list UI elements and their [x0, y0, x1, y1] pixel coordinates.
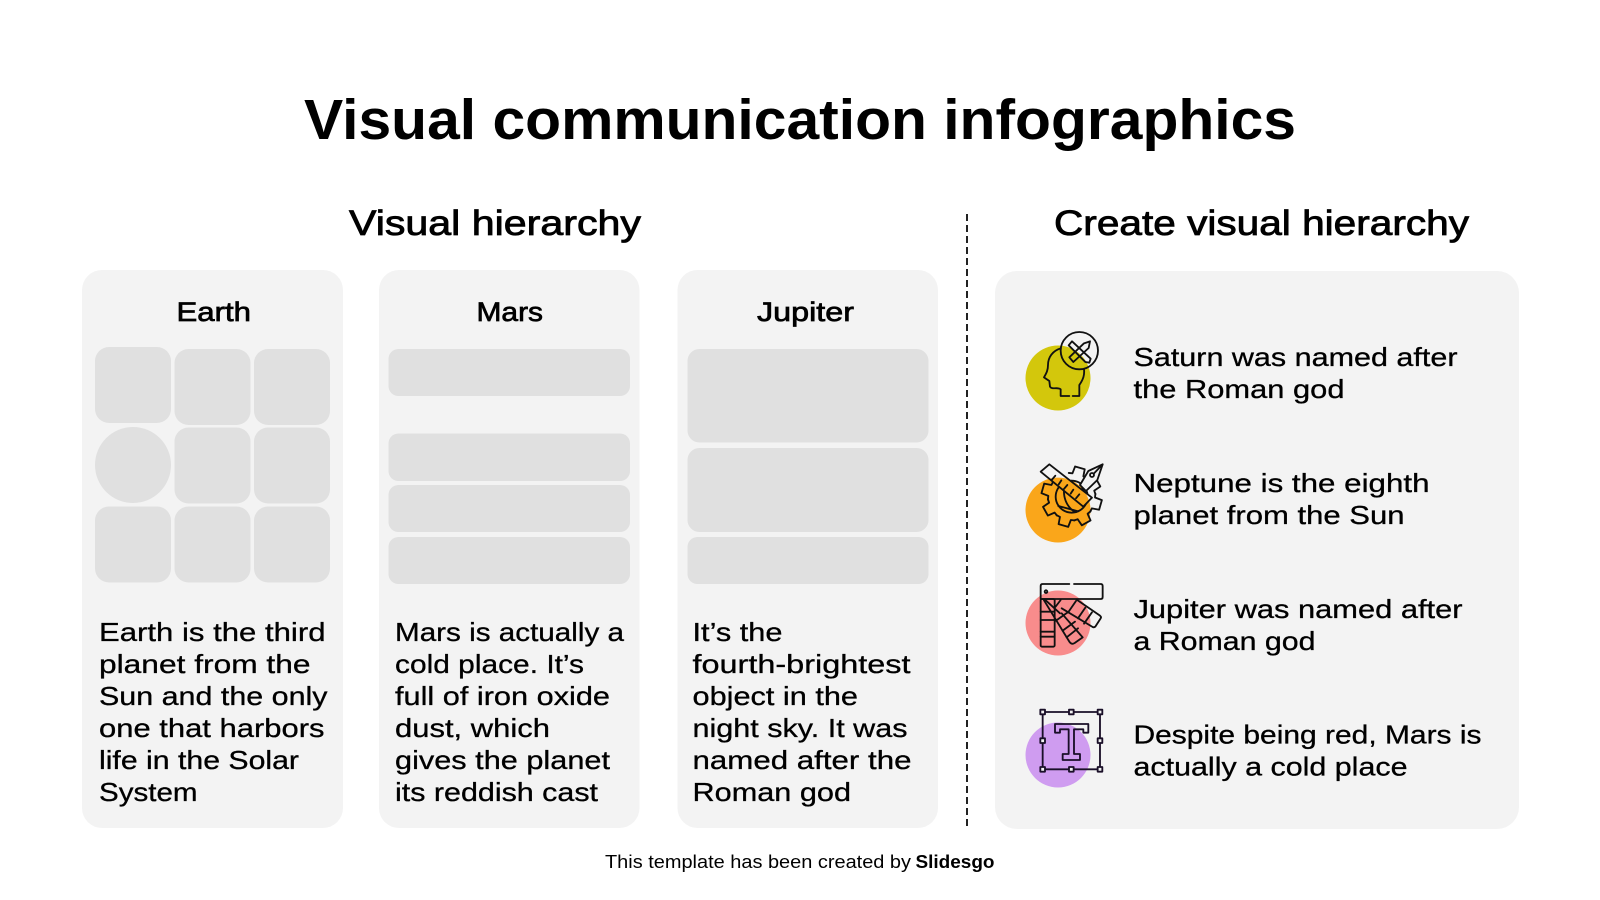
text: Saturn: the Roman god: [1134, 374, 1344, 404]
body text: Mars: Mars is actually a: [395, 617, 625, 647]
icon: text selection box: [1026, 710, 1102, 788]
body text: Mars: cold place. It’s: [395, 649, 584, 679]
text: Despite: [1134, 720, 1482, 782]
body text: Jupiter: Roman god: [692, 777, 851, 807]
body text: Mars: [395, 617, 625, 807]
body text: Earth: life in the Solar: [99, 745, 299, 775]
icon: colour swatch fan: [1026, 584, 1103, 656]
body text: Earth: System: [99, 777, 198, 807]
body text: Jupiter: object in the: [692, 681, 858, 711]
text: Jupiter: Jupiter was named after: [1134, 594, 1463, 624]
body text: Jupiter: It’s the: [692, 617, 782, 647]
panel heading: Earth: Earth: [176, 297, 251, 327]
body text: Earth: Sun and the only: [99, 681, 328, 711]
icon: gear with ruler and pen: [1026, 460, 1109, 542]
body text: Mars: full of iron oxide: [395, 681, 610, 711]
blocks layout diagram: [688, 349, 928, 584]
body text: Mars: gives the planet: [395, 745, 611, 775]
heading: create visual hierarchy: Create visual hierarchy: [1054, 204, 1470, 243]
body text: Jupiter: fourth-brightest: [692, 649, 911, 679]
body text: Mars: its reddish cast: [395, 777, 599, 807]
text: Jupiter: a Roman god: [1134, 626, 1316, 656]
body text: Earth: Earth is the third: [99, 617, 326, 647]
grid layout diagram: [95, 347, 330, 582]
panel: Jupiter: [678, 270, 938, 828]
rows layout diagram: [388, 349, 630, 584]
body text: Earth: planet from the: [99, 649, 310, 679]
body text: Earth: one that harbors: [99, 713, 324, 743]
text: Neptune: Neptune is the eighth: [1134, 468, 1430, 498]
body text: Jupiter: [692, 617, 912, 807]
text: Neptune: planet from the Sun: [1134, 500, 1404, 530]
text: Jupiter: [1134, 594, 1463, 656]
body text: Jupiter: named after the: [692, 745, 912, 775]
text: Despite: Despite being red, Mars is: [1134, 720, 1482, 750]
text: Saturn: Saturn was named after: [1134, 342, 1458, 372]
divider: [966, 214, 968, 828]
text: Neptune: [1134, 468, 1430, 530]
heading: visual hierarchy: Visual hierarchy: [349, 204, 642, 243]
text: Despite: actually a cold place: [1134, 752, 1408, 782]
text: Saturn: [1134, 342, 1458, 404]
icon: head with pencils: [1026, 332, 1098, 410]
body text: Earth: [99, 617, 328, 807]
panel heading: Mars: Mars: [476, 297, 543, 327]
body text: Jupiter: night sky. It was: [692, 713, 908, 743]
panel: create visual hierarchy: [995, 271, 1519, 829]
footer credit: This template has been created by: [605, 852, 911, 872]
footer credit: Slidesgo: [916, 852, 995, 872]
panel: Earth: [82, 270, 343, 828]
title: Visual communication infographics: [304, 88, 1296, 152]
panel heading: Jupiter: Jupiter: [757, 297, 854, 327]
body text: Mars: dust, which: [395, 713, 550, 743]
panel: Mars: [379, 270, 640, 828]
